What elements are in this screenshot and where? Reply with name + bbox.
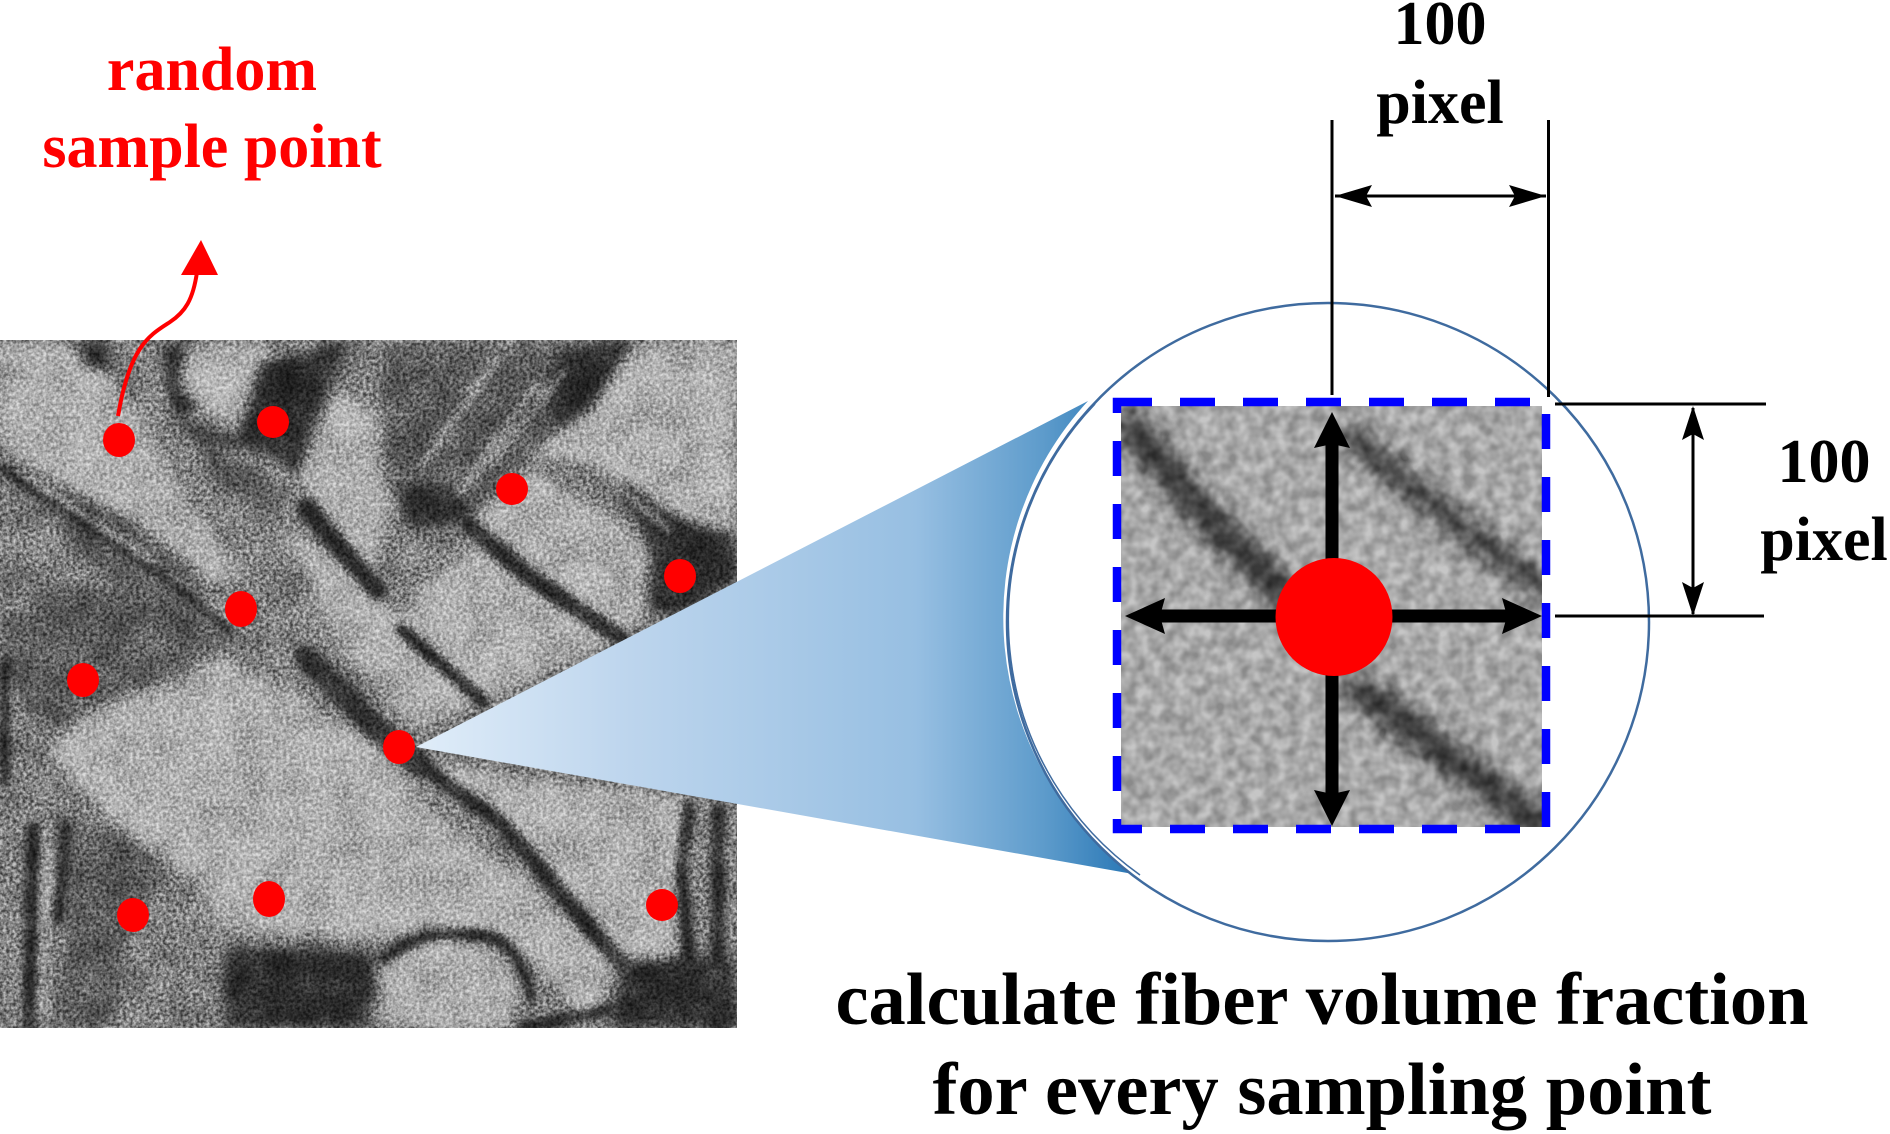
magnified sample patch xyxy=(1117,402,1546,830)
magnified circle xyxy=(1007,303,1649,941)
vertical dimension: 100 pixel: 100 xyxy=(1778,428,1870,496)
magnification fan xyxy=(416,401,1133,874)
red callout: random sample point: random xyxy=(107,36,317,104)
dashed blue frame xyxy=(1117,402,1546,829)
red callout: random sample point: sample point xyxy=(42,113,382,181)
centre sample point xyxy=(1276,558,1392,676)
sample points xyxy=(67,406,696,932)
horizontal dimension: 100 pixel: pixel xyxy=(1376,69,1504,137)
vertical dimension: 100 pixel xyxy=(1555,404,1888,616)
vertical dimension: 100 pixel: pixel xyxy=(1760,506,1888,574)
caption: for every sampling point xyxy=(933,1049,1712,1131)
micrograph with random sample points xyxy=(0,340,737,1028)
horizontal dimension: 100 pixel xyxy=(1332,0,1548,397)
caption xyxy=(835,959,1809,1131)
red callout: random sample point xyxy=(42,36,382,416)
four-way black arrows xyxy=(1125,412,1542,826)
caption: calculate fiber volume fraction xyxy=(835,959,1809,1041)
